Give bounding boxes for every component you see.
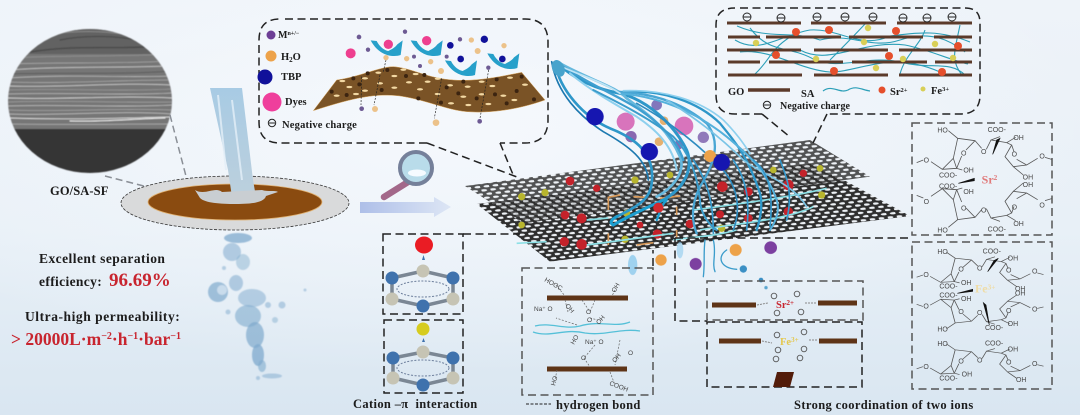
panel: hydrogen bond: O	[628, 350, 633, 357]
panel: Sr chelate structure: O	[1039, 202, 1045, 209]
panel: Fe chelate structure: COO-	[939, 292, 958, 299]
panel: Fe chelate structure: O	[923, 304, 929, 311]
zoom lead lines from disc to micrograph	[105, 115, 190, 198]
panel: Fe chelate structure: O	[1032, 361, 1038, 368]
performance text: −2	[101, 331, 112, 342]
performance text: Ultra-high permeability:	[25, 309, 180, 324]
panel: hydrogen bond: OH	[563, 303, 575, 315]
panel: hydrogen bond	[522, 268, 653, 395]
legend: M	[278, 30, 287, 41]
heading: strong coordination: Strong coordination of two ions	[794, 398, 974, 412]
ions on mesh	[518, 165, 825, 250]
legend: SA	[801, 89, 815, 100]
orange chain segments	[608, 195, 680, 245]
legend: Negative charge	[282, 120, 357, 131]
middle sugar unit	[917, 295, 1044, 329]
arrow	[360, 197, 451, 217]
panel: hydrogen bond: Na⁺ O	[585, 339, 604, 346]
panel: Sr chelate structure: COO-	[939, 183, 958, 190]
Sr ions	[772, 26, 962, 76]
panel: Fe chelate structure: O	[977, 265, 983, 272]
panel: Sr chelate structure: O	[1012, 204, 1018, 211]
large leader lines from mesh to the lower panels	[463, 234, 912, 321]
panel: Sr coordination between sheets	[707, 281, 863, 320]
legend	[258, 30, 357, 131]
legend: TBP	[281, 72, 302, 83]
panel: Fe chelate structure: COO-	[939, 376, 958, 383]
legend: Dyes	[285, 97, 307, 108]
panel: Fe chelate structure: OH	[1008, 347, 1018, 354]
negative charges	[743, 13, 956, 22]
legend: Sr	[890, 87, 900, 98]
legend: 2+	[900, 87, 908, 94]
Fe ions	[753, 25, 956, 71]
panel: Fe chelate structure: OH	[1015, 286, 1025, 293]
heading: hydrogen bond: hydrogen bond	[556, 398, 641, 412]
panel: hydrogen bond: O	[586, 309, 591, 316]
panel: Sr coordination between sheets: 2+	[786, 299, 794, 307]
performance text: 96.69%	[109, 270, 171, 291]
performance text: ·h	[112, 329, 128, 349]
panel: Fe chelate structure: OH	[961, 280, 971, 287]
legend	[728, 86, 949, 112]
panel: Fe chelate structure: COO-	[985, 325, 1004, 332]
panel: hydrogen bond: OH	[611, 352, 623, 364]
bottom sugar unit	[917, 344, 1044, 378]
panel: Fe chelate structure: O	[1006, 360, 1012, 367]
panel: Sr chelate structure: HO	[937, 228, 948, 235]
brown GO membrane with channels	[313, 29, 545, 126]
panel: Sr chelate structure: O	[924, 157, 930, 164]
panel: Fe chelate structure: Fe	[975, 282, 988, 296]
legend: Fe	[931, 86, 942, 97]
panel: Fe chelate structure: HO	[937, 327, 948, 334]
panel: Sr chelate structure: OH	[963, 189, 974, 196]
panel: Fe chelate structure: O	[923, 272, 929, 279]
panel: Fe chelate structure: HO	[937, 249, 948, 256]
panel: Fe chelate structure: OH	[962, 372, 972, 379]
legend: Negative charge	[780, 101, 851, 112]
panel: cation-pi ring with Fe	[384, 320, 463, 393]
callout: GO/SA structure	[716, 8, 980, 143]
panel: Fe chelate structure: O	[1032, 269, 1038, 276]
panel: cation-pi ring with Sr	[383, 234, 463, 314]
top sugar unit	[917, 252, 1044, 287]
panel: Fe chelate structure: O	[977, 358, 983, 365]
panel: Sr chelate structure	[912, 123, 1052, 235]
legend: n+/−	[287, 31, 300, 37]
panel: Sr coordination between sheets: Sr	[776, 300, 786, 311]
water splash	[195, 190, 278, 204]
legend: H	[281, 52, 289, 63]
performance text	[11, 251, 181, 349]
panel: Fe chelate structure: O	[923, 364, 929, 371]
fibre head	[549, 58, 567, 79]
panel: Sr chelate structure: O	[924, 199, 930, 206]
panel: Fe chelate structure: COO-	[983, 248, 1002, 255]
panel: Fe chelate structure: O	[958, 309, 964, 316]
panel: hydrogen bond: COOH	[608, 380, 629, 394]
panel: Fe chelate structure: HO	[937, 341, 948, 348]
legend: 3+	[942, 86, 949, 93]
panel: Fe coordination between sheets: Fe	[780, 337, 791, 348]
panel: Sr chelate structure: O	[1012, 152, 1018, 159]
permeating particles	[586, 108, 777, 289]
performance text: Excellent separation	[39, 251, 165, 266]
panel: Fe chelate structure: OH	[1016, 377, 1026, 384]
panel: Sr chelate structure: O	[981, 149, 987, 156]
panel: Sr chelate structure: OH	[1013, 135, 1024, 142]
performance text: efficiency:	[39, 274, 102, 289]
GO/SA mesh layers with ions and fibres	[465, 58, 910, 289]
performance text: −1	[127, 331, 138, 342]
panel: Fe chelate structure: O	[958, 266, 964, 273]
performance text: > 20000L·m	[11, 329, 101, 349]
falling water drops	[208, 233, 306, 380]
panel: hydrogen bond: Na⁺ O	[534, 306, 553, 313]
GO sheets	[727, 23, 972, 75]
panel: Fe chelate structure: O	[1006, 267, 1012, 274]
panel: hydrogen bond: HO	[550, 375, 559, 387]
panel: Sr chelate structure: HO	[937, 128, 948, 135]
water column	[195, 88, 278, 204]
panel: Fe chelate structure	[912, 242, 1052, 389]
panel: Sr chelate structure: 2	[994, 173, 998, 182]
panel: Sr chelate structure: O	[981, 208, 987, 215]
pink and purple particles behind fibres	[617, 100, 709, 150]
panel: Sr chelate structure: O	[961, 206, 967, 213]
panel: Sr chelate structure: OH	[1013, 221, 1024, 228]
callout: membrane separation	[258, 19, 548, 177]
panel: Sr chelate structure: COO-	[988, 227, 1007, 234]
panel: hydrogen bond: O	[581, 355, 586, 362]
panel: hydrogen bond: OH	[611, 282, 622, 294]
heading: cation-pi: Cation –π interaction	[353, 397, 478, 411]
legend: GO	[728, 87, 744, 98]
lower mesh sheet	[477, 163, 910, 262]
panel: Fe coordination between sheets: 3+	[791, 336, 799, 344]
label: GO/SA-SF: GO/SA-SF	[50, 184, 109, 198]
cyan fibres in mesh	[517, 188, 827, 245]
panel: Fe chelate structure: O	[977, 310, 983, 317]
panel: Sr chelate structure: COO-	[988, 127, 1007, 134]
legend: 2	[289, 56, 293, 64]
performance text: −1	[170, 331, 181, 342]
legend: O	[293, 52, 301, 63]
panel: Fe chelate structure: OH	[1008, 256, 1018, 263]
panel: Fe chelate structure: O	[1032, 307, 1038, 314]
panel: Sr chelate structure: COO-	[939, 172, 958, 179]
panel: Sr chelate structure: OH	[963, 168, 974, 175]
SA fibres	[735, 24, 970, 75]
upper sugar unit	[917, 131, 1052, 175]
panel: hydrogen bond: HOOC	[543, 277, 564, 293]
panel: Fe chelate structure: COO-	[985, 340, 1004, 347]
SEM micrograph inset	[7, 28, 173, 174]
blue fibre strands	[552, 62, 807, 277]
panel: Fe chelate structure: O	[1006, 308, 1012, 315]
panel: Fe chelate structure: O	[958, 359, 964, 366]
panel: hydrogen bond: HO	[570, 334, 581, 346]
panel: hydrogen bond: O	[587, 317, 592, 324]
panel: Sr chelate structure: OH	[1023, 174, 1033, 181]
lower sugar unit	[917, 183, 1052, 227]
membrane disc	[121, 176, 349, 230]
panel: Fe chelate structure: OH	[1008, 321, 1018, 328]
panel: Sr chelate structure: O	[1039, 153, 1045, 160]
upper mesh sheet	[465, 140, 870, 223]
panel: Sr chelate structure: Sr	[982, 172, 994, 186]
panel: Fe coordination between sheets	[707, 322, 862, 387]
panel: Fe chelate structure: OH	[961, 296, 971, 303]
panel: Fe chelate structure: OH	[1015, 290, 1025, 297]
performance text: ·bar	[138, 329, 170, 349]
panel: hydrogen bond: OH	[595, 314, 607, 326]
icon: magnifying glass	[384, 152, 432, 197]
panel: Sr chelate structure: O	[961, 150, 967, 157]
panel: Fe chelate structure: 3+	[988, 282, 995, 291]
panel: Fe chelate structure: COO-	[939, 283, 958, 290]
panel: Sr chelate structure: OH	[1023, 182, 1033, 189]
